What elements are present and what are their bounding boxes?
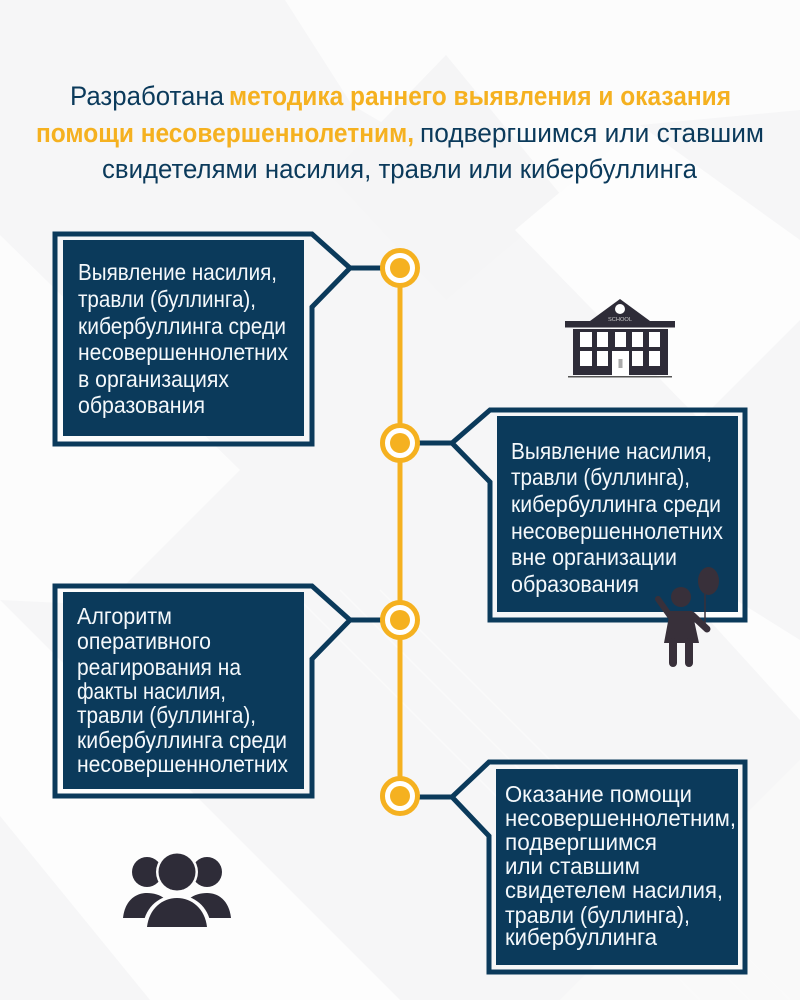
text: panel 1: кибербуллинга среди <box>78 313 286 339</box>
text: panel 4 <box>505 781 736 950</box>
title: подвергшимся или ставшим <box>420 118 764 148</box>
icon: school <box>565 299 675 378</box>
panel: detection outside schools <box>418 410 745 620</box>
text: panel 1: несовершеннолетних <box>78 339 288 365</box>
icon: child with balloon <box>658 567 719 663</box>
text: panel 4: кибербуллинга <box>505 924 657 950</box>
text: panel 1: Выявление насилия, <box>78 259 277 285</box>
text: panel 1: в организациях <box>78 366 229 392</box>
timeline node 4 <box>382 778 418 814</box>
text: panel 2: кибербуллинга среди <box>511 491 721 517</box>
text: panel 3 <box>77 603 288 777</box>
text: panel 2 <box>511 438 723 597</box>
title: методика раннего выявления и оказания <box>229 81 731 111</box>
title <box>36 81 764 184</box>
text: panel 4: или ставшим <box>505 853 640 879</box>
text: panel 1: образования <box>78 392 205 418</box>
text: panel 3: реагирования на <box>77 654 241 680</box>
text: panel 3: травли (буллинга), <box>77 702 256 728</box>
text: panel 2: травли (буллинга), <box>511 464 690 490</box>
title: Разработана <box>70 81 225 111</box>
text: panel 1: травли (буллинга), <box>78 286 256 312</box>
panel: detection in schools <box>55 234 382 444</box>
text: panel 2: Выявление насилия, <box>511 438 712 464</box>
text: panel 2: образования <box>511 571 639 597</box>
text: panel 3: оперативного <box>77 628 211 654</box>
text: panel 3: кибербуллинга среди <box>77 727 287 753</box>
icon: school: SCHOOL <box>608 317 632 323</box>
text: panel 2: вне организации <box>511 544 677 570</box>
text: panel 1 <box>78 259 288 418</box>
panel: response algorithm <box>55 586 382 796</box>
text: panel 3: факты насилия, <box>77 678 226 704</box>
timeline line <box>398 268 402 796</box>
text: panel 4: свидетелем насилия, <box>505 877 723 903</box>
timeline node 1 <box>382 250 418 286</box>
text: panel 4: подвергшимся <box>505 829 657 855</box>
text: panel 2: несовершеннолетних <box>511 518 723 544</box>
text: panel 3: несовершеннолетних <box>77 751 288 777</box>
title: помощи несовершеннолетним, <box>36 118 414 148</box>
text: panel 4: травли (буллинга), <box>505 902 690 928</box>
text: panel 4: несовершеннолетним, <box>505 805 736 831</box>
panel: providing help <box>418 762 745 972</box>
title: свидетелями насилия, травли или кибербуллинга <box>102 154 698 184</box>
timeline node 3 <box>382 602 418 638</box>
text: panel 3: Алгоритм <box>77 603 172 629</box>
timeline node 2 <box>382 426 418 460</box>
icon: group of people <box>123 851 231 930</box>
text: panel 4: Оказание помощи <box>505 781 692 807</box>
